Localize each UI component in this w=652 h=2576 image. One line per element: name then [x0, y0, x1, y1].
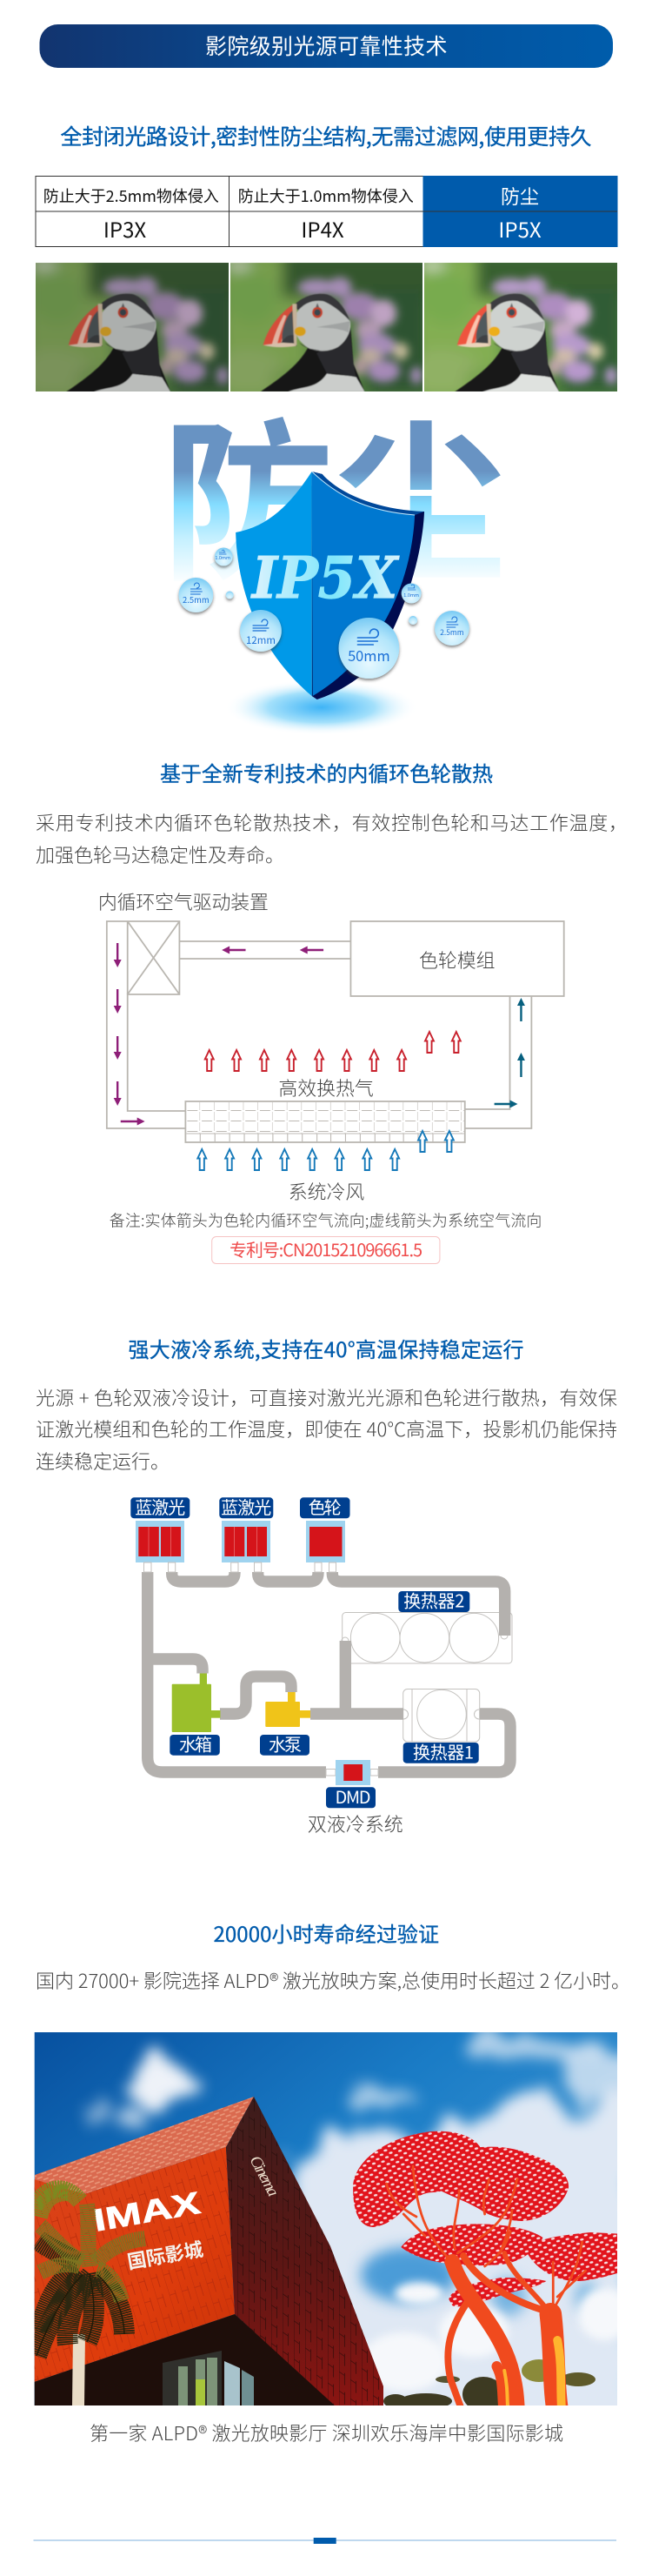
cinema name sign: 国际影城 [125, 2234, 205, 2275]
building soffit and glass [34, 2314, 335, 2405]
component labels [130, 1494, 479, 1809]
background palm silhouettes [383, 2359, 595, 2412]
big background characters: 防尘 [162, 365, 508, 616]
text block: colour wheel cooling: 采用专利技术内循环色轮散热技术，有效控制色轮和马达工作温度， [36, 808, 628, 836]
water pump [265, 1692, 310, 1727]
label: system cold air: 系统冷风 [289, 1178, 364, 1205]
text block: lifetime: 国内 27000+ 影院选择 ALPD® 激光放映方案,总使用时长超过 2 亿小时。 [36, 1966, 630, 1994]
glow under shield [224, 679, 418, 735]
duct lines [107, 921, 531, 1128]
illustration: IP5X shield [162, 365, 508, 735]
coolant pipes [148, 1572, 510, 1772]
table cell text: 防止大于1.0mm物体侵入 [238, 184, 414, 207]
sky clouds [83, 2031, 639, 2427]
chart: internal circulation airflow diagram [98, 888, 564, 1263]
heading: colour wheel cooling: 基于全新专利技术的内循环色轮散热 [160, 757, 493, 787]
palm tree [35, 2189, 145, 2405]
red tree sculpture [353, 2131, 626, 2410]
label: air drive: 内循环空气驱动装置 [98, 888, 269, 915]
blue laser module 2 [222, 1521, 270, 1572]
dust bubbles: 2.5mm [183, 593, 210, 606]
note: arrow legend: 备注:实体箭头为色轮内循环空气流向;虚线箭头为系统空气流向 [110, 1208, 542, 1232]
panel: IP rating table [36, 176, 617, 247]
dust bubbles: 1.0mm [215, 554, 230, 561]
teal arrows: outgoing air [495, 998, 525, 1108]
dust bubbles: 50mm [348, 645, 390, 666]
text block: liquid cooling: 光源 + 色轮双液冷设计，可直接对激光光源和色轮进行散热，有效保 [36, 1383, 617, 1411]
IP5X label: IP5X [250, 544, 400, 612]
building roof [35, 2097, 254, 2194]
heading: lifetime: 20000小时寿命经过验证 [214, 1917, 439, 1948]
cinema logo: Cinema [246, 2152, 283, 2199]
footer divider [33, 2538, 616, 2544]
photo comparison: three puffins [14, 254, 632, 402]
photo: cinema building and red tree sculpture [35, 2032, 617, 2405]
component labels: 水泵 [269, 1731, 302, 1756]
IMAX sign: IMAX [90, 2185, 203, 2238]
dust bubbles [178, 548, 469, 679]
colour wheel module [350, 921, 564, 996]
title banner: 影院级别光源可靠性技术 [205, 30, 447, 61]
component labels: 色轮 [309, 1494, 342, 1519]
heat exchanger 1 [403, 1689, 480, 1742]
building orange facade [34, 2147, 235, 2382]
component labels: 换热器1 [413, 1738, 474, 1764]
trunks and branches [387, 2166, 586, 2410]
text block: liquid cooling: 证激光模组和色轮的工作温度，即使在 40°C高温下，投影机仍能保持 [36, 1415, 617, 1442]
heading: liquid cooling: 强大液冷系统,支持在40°高温保持稳定运行 [129, 1333, 523, 1363]
label: heat exchange air: 高效换热气 [278, 1074, 374, 1101]
component labels: 换热器2 [403, 1587, 464, 1613]
text block: colour wheel cooling: 加强色轮马达稳定性及寿命。 [36, 840, 284, 868]
trunk highlights [504, 2340, 562, 2410]
dust bubbles: 12mm [246, 633, 276, 647]
component labels: 水箱 [179, 1731, 212, 1756]
colour wheel module [306, 1521, 345, 1572]
table cell text: IP3X [103, 213, 146, 244]
blue laser module 1 [136, 1521, 184, 1572]
component labels: 蓝激光 [221, 1494, 271, 1519]
component labels: DMD [336, 1783, 370, 1809]
water tank [172, 1674, 221, 1732]
red arrows: hot air [205, 1032, 461, 1071]
table cell text [43, 182, 542, 244]
heat exchanger [185, 1101, 465, 1142]
DMD block [326, 1760, 378, 1785]
table cell text: IP5X [498, 213, 542, 244]
title banner [40, 24, 613, 68]
table cell text: IP4X [301, 213, 344, 244]
text block: liquid cooling [36, 1383, 617, 1475]
text block: colour wheel cooling [36, 808, 628, 868]
caption: first ALPD cinema: 第一家 ALPD® 激光放映影厅 深圳欢乐海岸中影国际影城 [90, 2419, 563, 2446]
purple arrows: internal air [114, 943, 323, 1126]
table cell text: 防止大于2.5mm物体侵入 [43, 184, 219, 207]
heat exchanger 2 [342, 1613, 512, 1663]
building dark facade [226, 2097, 383, 2405]
text block: liquid cooling: 连续稳定运行。 [36, 1447, 170, 1475]
component labels: 蓝激光 [135, 1494, 185, 1519]
perforated discs [353, 2131, 626, 2306]
chart: dual liquid cooling system [130, 1494, 512, 1837]
dust bubbles: 2.5mm [440, 627, 464, 638]
caption: dual liquid cooling: 双液冷系统 [308, 1810, 403, 1837]
blue arrows: cold air [197, 1131, 454, 1170]
heading: sealed light path: 全封闭光路设计,密封性防尘结构,无需过滤网,使用更持久 [61, 120, 591, 151]
table cell text: 防尘 [501, 182, 539, 210]
callout: patent number: 专利号:CN201521096661.5 [230, 1236, 422, 1261]
dust bubbles: 1.0mm [403, 592, 419, 599]
colour wheel module: 色轮模组 [419, 947, 496, 974]
shield body [236, 472, 424, 699]
